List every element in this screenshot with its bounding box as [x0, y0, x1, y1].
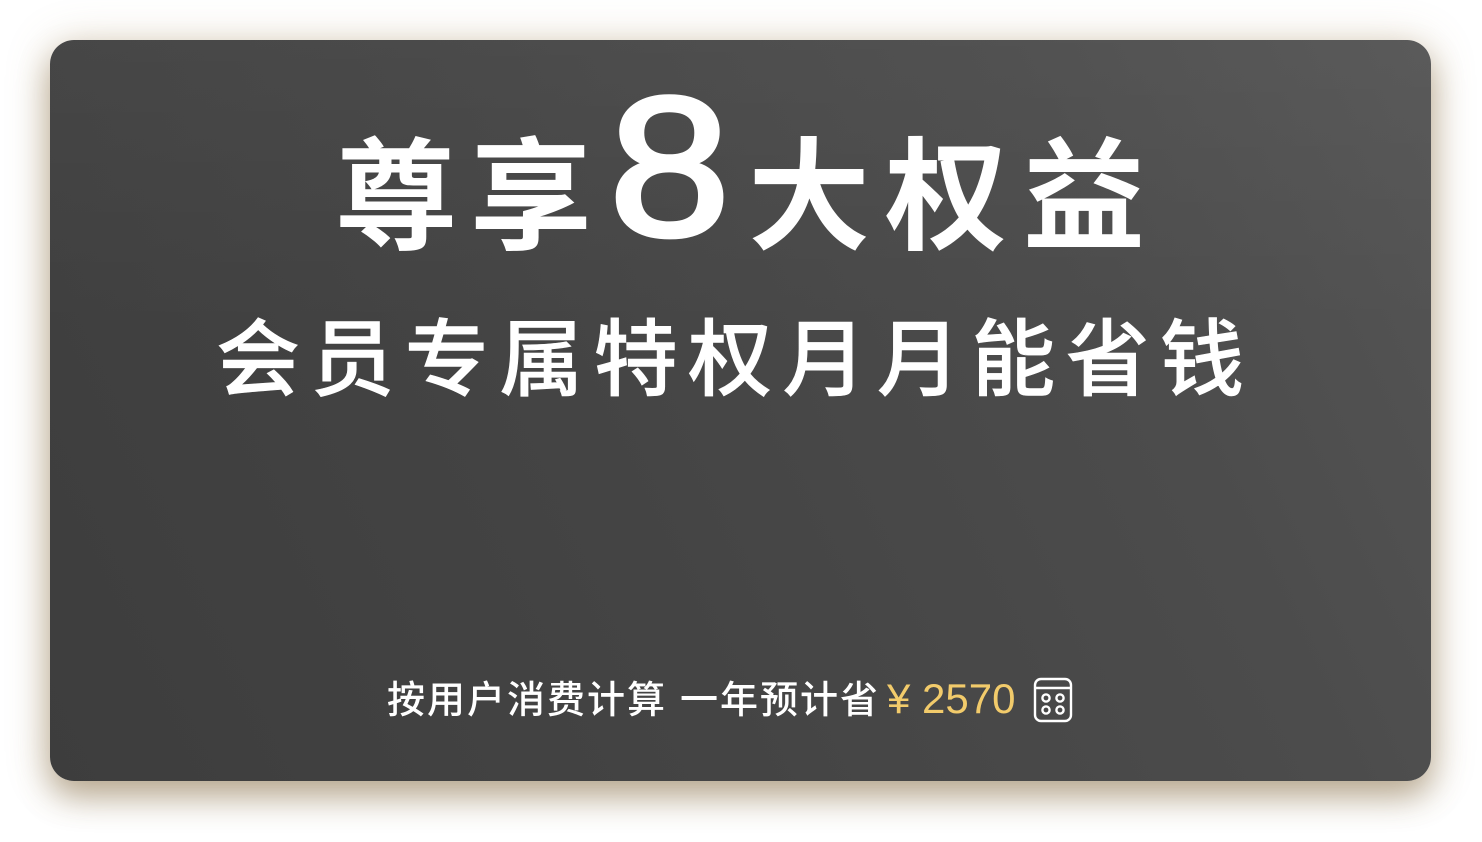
title: 尊享8大权益: 权: [885, 99, 1007, 276]
savings note: [387, 669, 1015, 724]
savings amount: ¥ 2570: [887, 675, 1015, 722]
icon: calculator: [1034, 678, 1072, 722]
savings note: 按用户消费计算: [387, 669, 667, 724]
title: 尊享8大权益: 尊: [335, 99, 457, 276]
title: 尊享8大权益: 益: [1023, 99, 1145, 276]
title: 尊享8大权益: 8: [609, 56, 730, 277]
title: 尊享8大权益: [335, 56, 1145, 277]
title: 尊享8大权益: 大: [748, 99, 870, 276]
subtitle: 会员专属特权月月能省钱: [216, 293, 1254, 414]
title: 尊享8大权益: 享: [470, 99, 592, 276]
savings note: 一年预计省: [680, 669, 880, 724]
